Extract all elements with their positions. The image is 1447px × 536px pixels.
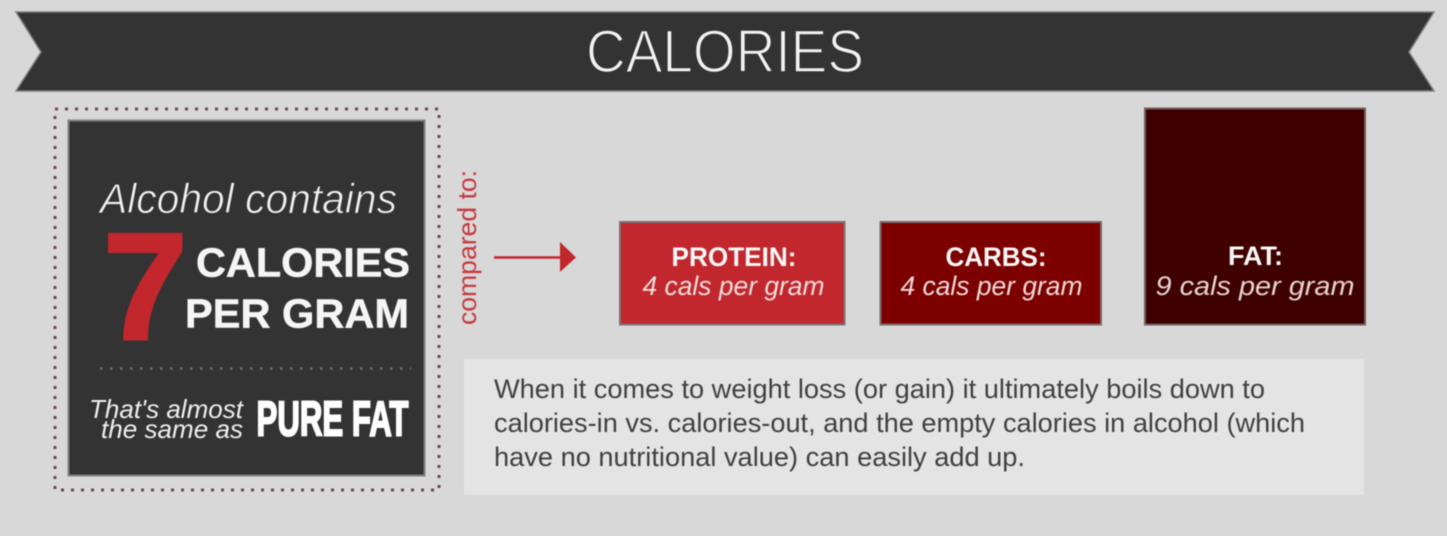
same as text: That's almost: [89, 394, 245, 424]
panel: protein: [620, 222, 844, 324]
panel: alcohol calories: PER GRAM: [185, 290, 409, 336]
panel: alcohol calories: [55, 109, 439, 490]
panel: protein: PROTEIN:: [672, 242, 796, 272]
pure fat text: PURE FAT: [256, 392, 409, 446]
big number seven: 7: [103, 202, 188, 372]
panel: alcohol calories: the same as: [101, 414, 243, 444]
panel: fat: FAT:: [1228, 241, 1283, 271]
calories per gram text: CALORIES: [196, 240, 410, 286]
explanation text box: [464, 359, 1364, 495]
panel: carbs: 4 cals per gram: [900, 271, 1082, 301]
panel: carbs: CARBS:: [946, 242, 1046, 272]
panel: carbs: [880, 222, 1101, 324]
panel: protein: 4 cals per gram: [642, 271, 824, 301]
alcohol contains text: Alcohol contains: [97, 175, 397, 222]
panel: fat: [1145, 108, 1365, 324]
compared to label: compared to:: [452, 170, 482, 325]
explanation text box: When it comes to weight loss (or gain) it ultimately boils down to: [494, 374, 1265, 404]
explanation text box: calories-in vs. calories-out, and the empty calories in alcohol (which: [494, 408, 1305, 438]
title banner: [16, 12, 1434, 91]
explanation text box: have no nutritional value) can easily add up.: [494, 442, 1025, 472]
arrow: [494, 242, 576, 272]
title: CALORIES: [586, 18, 864, 85]
panel: fat: 9 cals per gram: [1156, 271, 1354, 301]
